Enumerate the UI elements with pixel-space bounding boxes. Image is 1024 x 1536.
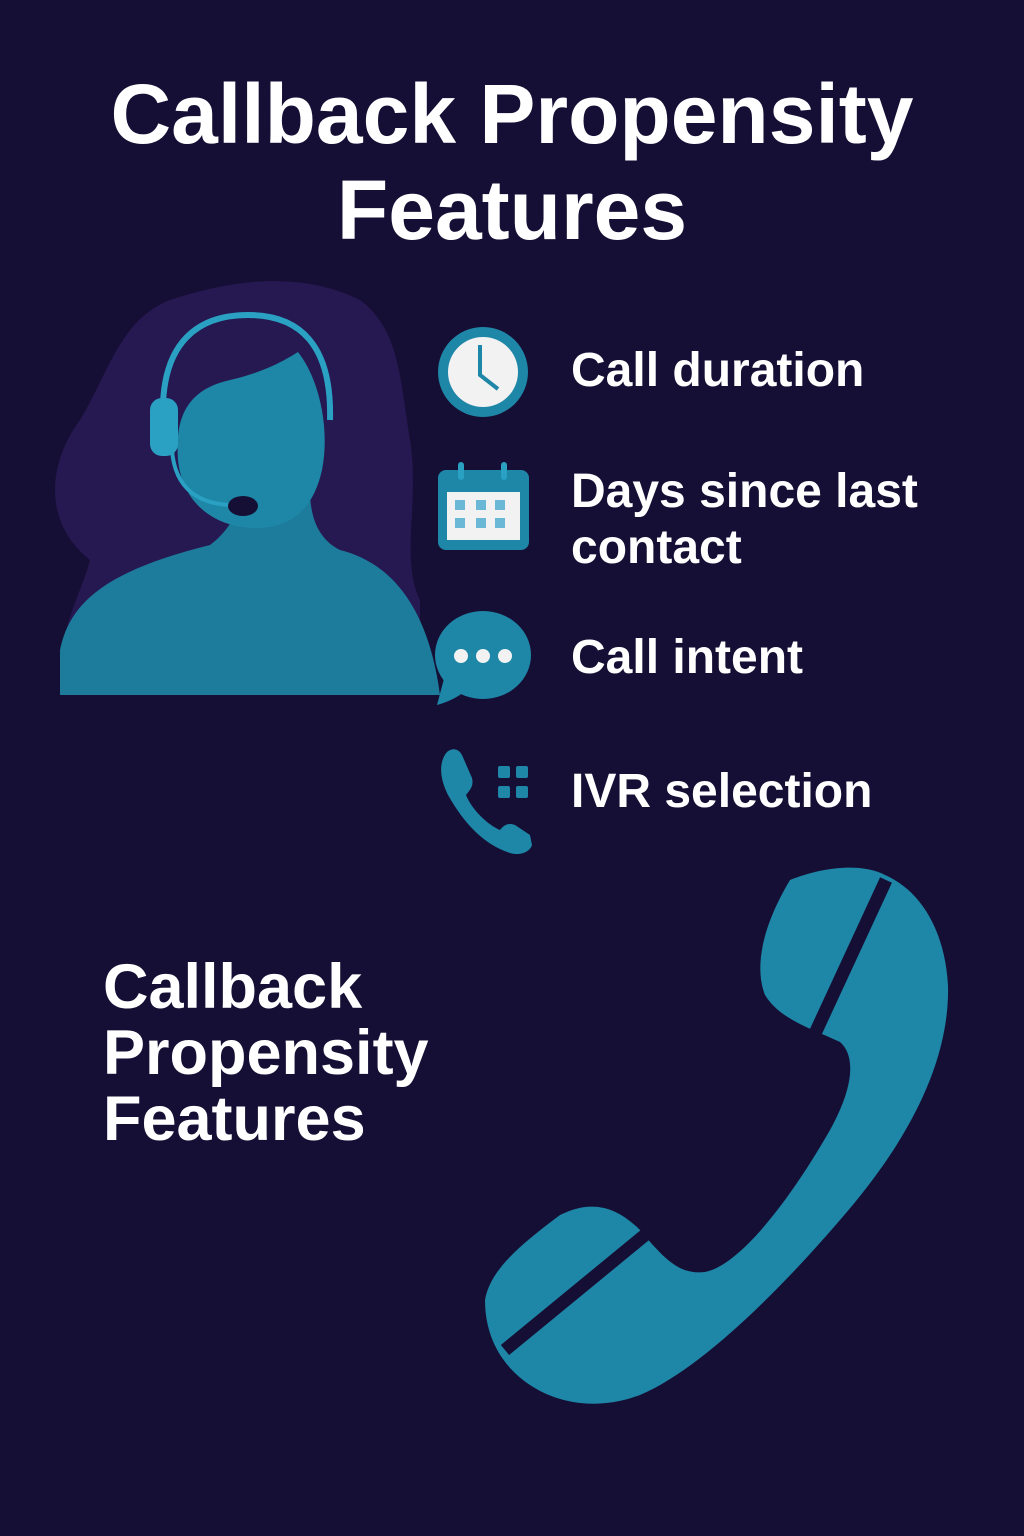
label: call duration: Call duration bbox=[571, 344, 864, 397]
body bbox=[60, 490, 440, 695]
label: days since last contact: contact bbox=[571, 521, 742, 574]
title: Features bbox=[337, 163, 687, 257]
icon: phone keypad bbox=[441, 749, 532, 854]
icon: clock bbox=[438, 327, 528, 417]
headset bbox=[163, 315, 330, 420]
icon: calendar bbox=[438, 462, 529, 550]
title: Callback Propensity bbox=[111, 67, 913, 161]
label: days since last contact: Days since last bbox=[571, 465, 918, 518]
subtitle: Features bbox=[103, 1084, 366, 1154]
title bbox=[111, 67, 913, 257]
label: call intent: Call intent bbox=[571, 631, 803, 684]
head bbox=[178, 352, 325, 528]
subtitle bbox=[103, 952, 429, 1154]
label: days since last contact bbox=[571, 465, 918, 574]
subtitle: Callback bbox=[103, 952, 362, 1022]
hair silhouette bbox=[55, 281, 420, 690]
label: IVR selection: IVR selection bbox=[571, 765, 872, 818]
icon: speech bubble bbox=[435, 611, 531, 705]
big phone handset bbox=[485, 868, 948, 1404]
subtitle: Propensity bbox=[103, 1018, 429, 1088]
